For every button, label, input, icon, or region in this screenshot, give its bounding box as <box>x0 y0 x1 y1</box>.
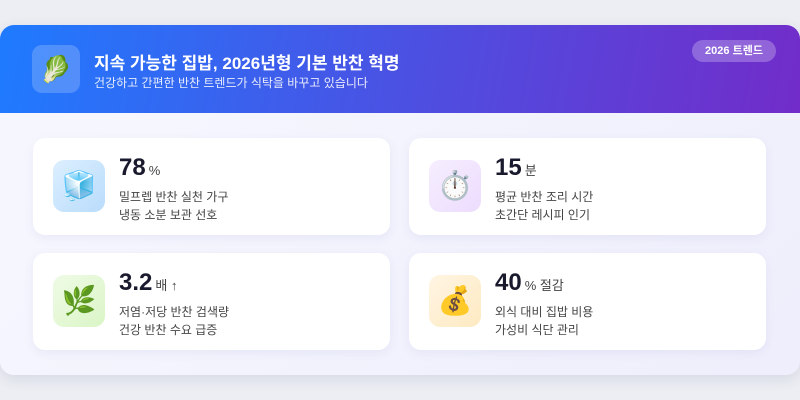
stat number: 40% 절감 <box>495 269 564 296</box>
icon: herb <box>53 275 105 327</box>
description <box>119 305 229 337</box>
description: 건강 반찬 수요 급증 <box>119 323 217 337</box>
card: 78% <box>33 138 390 235</box>
card: 40% <box>409 253 766 350</box>
icon: money bag <box>429 275 481 327</box>
card: 15분 <box>409 138 766 235</box>
description: 평균 반찬 조리 시간 <box>495 190 593 204</box>
icon: lettuce: 🥬 <box>40 54 72 84</box>
description <box>119 190 228 222</box>
description: 냉동 소분 보관 선호 <box>119 208 217 222</box>
icon: lettuce <box>32 45 80 93</box>
icon: stopwatch: ⏱️ <box>438 170 472 201</box>
icon: ice <box>53 160 105 212</box>
title: 지속 가능한 집밥, 2026년형 기본 반찬 혁명 <box>94 54 399 73</box>
subtitle: 건강하고 간편한 반찬 트렌드가 식탁을 바꾸고 있습니다 <box>94 76 368 90</box>
badge <box>692 40 776 62</box>
description: 외식 대비 집밥 비용 <box>495 305 593 319</box>
icon: herb: 🌿 <box>62 285 96 316</box>
icon: ice: 🧊 <box>62 170 96 201</box>
description <box>495 190 593 222</box>
badge: 2026 트렌드 <box>705 45 763 57</box>
icon: stopwatch <box>429 160 481 212</box>
header banner <box>0 25 800 113</box>
stat number: 3.2배 ↑ <box>119 269 177 296</box>
stat number: 15분 <box>495 154 537 181</box>
description: 밀프렙 반찬 실천 가구 <box>119 190 228 204</box>
card: 3.2배 <box>33 253 390 350</box>
icon: money bag: 💰 <box>438 285 472 316</box>
stat number: 78% <box>119 154 160 181</box>
description: 가성비 식단 관리 <box>495 323 579 337</box>
description <box>495 305 593 337</box>
description: 초간단 레시피 인기 <box>495 208 590 222</box>
description: 저염·저당 반찬 검색량 <box>119 305 229 319</box>
